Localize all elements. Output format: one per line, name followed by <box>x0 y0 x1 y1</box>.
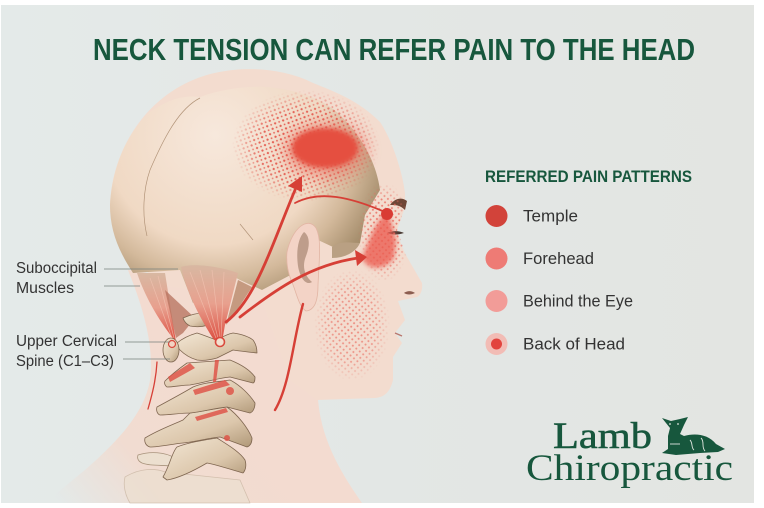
eye <box>387 231 404 234</box>
temple and forehead pain heat <box>234 92 406 378</box>
anatomical head illustration <box>45 69 422 503</box>
logo wordmark: Lamb <box>553 416 652 457</box>
inner ear <box>297 232 312 283</box>
back of neck muscle <box>137 273 176 342</box>
vertebrae <box>124 313 257 503</box>
glow around crown hotspot <box>283 122 367 178</box>
side muscle <box>226 280 252 325</box>
spine irritation marks <box>168 360 234 441</box>
muscle attachment points <box>216 338 224 346</box>
arrow to eye area <box>240 250 367 317</box>
legend item: behind the eye <box>486 290 633 312</box>
dark cavity under skull <box>165 290 195 338</box>
anatomy labels <box>16 260 178 370</box>
legend item: temple <box>486 205 578 227</box>
skull suture <box>144 98 253 240</box>
head skin <box>110 69 422 400</box>
arrow up to ear <box>275 304 303 410</box>
skull <box>110 87 380 303</box>
label: upper cervical spine: Upper Cervical <box>16 333 117 350</box>
arrow to temple point <box>295 196 393 220</box>
arrow to crown <box>226 176 302 322</box>
logo wordmark: Chiropractic <box>526 448 733 489</box>
label: suboccipital muscles <box>16 260 178 297</box>
legend item: forehead: Forehead <box>523 250 594 268</box>
muscle fibres <box>150 270 224 338</box>
icon: lamb <box>662 417 725 455</box>
pain around the eye <box>360 186 406 280</box>
legend: referred pain patterns <box>485 167 692 355</box>
cheekbone arch <box>332 242 360 258</box>
legend heading: REFERRED PAIN PATTERNS <box>485 167 692 186</box>
stipple around crown <box>234 92 378 200</box>
legend item: back of head: Back of Head <box>523 336 625 354</box>
label: suboccipital muscles: Suboccipital <box>16 260 97 277</box>
blush around the eye <box>362 212 396 268</box>
eyebrow <box>390 199 407 210</box>
mouth <box>395 333 402 336</box>
logo: Lamb Chiropractic <box>526 416 733 489</box>
crown hotspot <box>292 128 358 168</box>
cervical attachment point <box>168 340 176 348</box>
main muscle fan <box>181 265 238 342</box>
label: upper cervical spine: Spine (C1–C3) <box>16 353 114 370</box>
nostril <box>404 291 415 294</box>
stipple on cheek <box>316 272 388 378</box>
legend item: back of head <box>486 333 625 355</box>
referral arrows <box>148 176 393 410</box>
legend item: behind the eye: Behind the Eye <box>523 292 633 310</box>
ear <box>287 223 320 311</box>
neck and shoulders <box>45 270 362 503</box>
back of neck line <box>148 362 157 409</box>
logo wordmark <box>526 416 733 489</box>
label: upper cervical spine <box>16 333 170 370</box>
legend item: forehead <box>486 248 594 270</box>
label: suboccipital muscles: Muscles <box>16 280 74 297</box>
legend item: temple: Temple <box>523 208 578 226</box>
